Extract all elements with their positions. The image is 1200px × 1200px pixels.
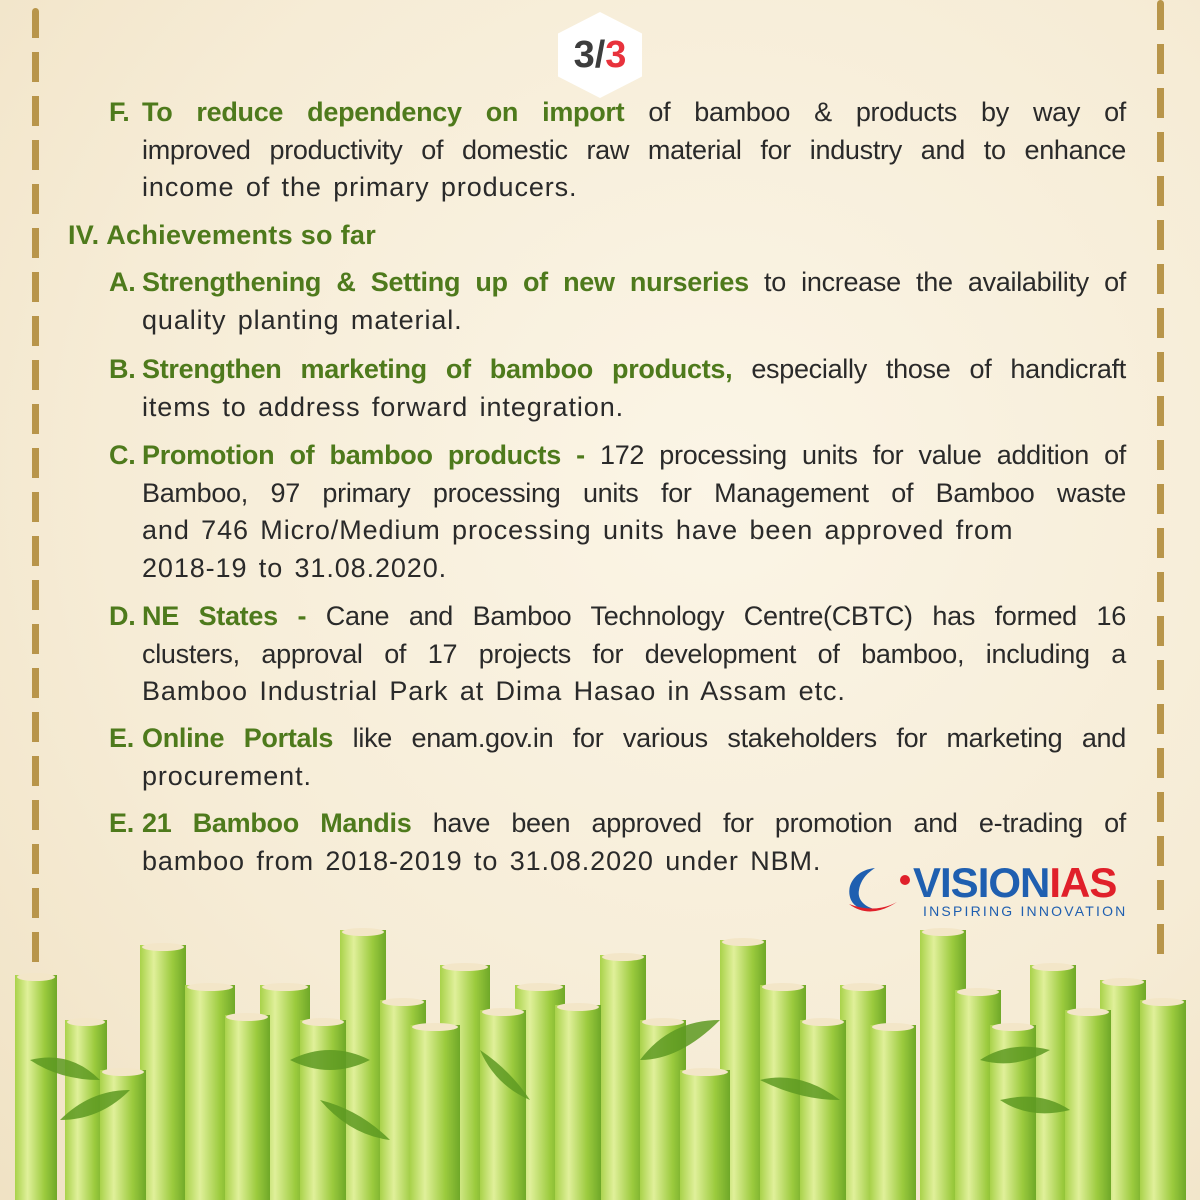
item E online portals: procurement.: [142, 760, 312, 790]
item B: items to address forward integration.: [142, 392, 624, 422]
item F: improved productivity of domestic raw material for industry and to enhance: [142, 134, 1126, 164]
text: F.: [109, 97, 129, 127]
item C: Promotion of bamboo products - 172 processing units for value addition of: [142, 440, 1126, 470]
item F: [109, 97, 1126, 202]
badge: page number: [558, 12, 642, 98]
text: A.: [109, 267, 135, 297]
item F: To reduce dependency on import of bamboo & products by way of: [142, 97, 1126, 127]
item E bamboo mandis: 21 Bamboo Mandis have been approved for promotion and e-trading of: [142, 808, 1126, 838]
text: C.: [109, 440, 135, 470]
item E bamboo mandis: bamboo from 2018-2019 to 31.08.2020 under NBM.: [142, 846, 821, 876]
item A: quality planting material.: [142, 304, 463, 334]
badge: page number: 3/3: [574, 34, 626, 76]
text: E.: [109, 723, 134, 753]
item C: and 746 Micro/Medium processing units have been approved from: [142, 515, 1013, 545]
text: D.: [109, 601, 135, 631]
item C: Bamboo, 97 primary processing units for Management of Bamboo waste: [142, 478, 1126, 508]
item E online portals: Online Portals like enam.gov.in for various stakeholders for marketing and: [142, 723, 1126, 753]
item B: [109, 354, 1126, 422]
item E bamboo mandis: [109, 808, 1126, 876]
heading: achievements: IV. Achievements so far: [68, 220, 376, 250]
text: E.: [109, 808, 134, 838]
item F: income of the primary producers.: [142, 172, 577, 202]
logo: Vision IAS: VISIONIAS: [913, 859, 1116, 906]
item C: 2018-19 to 31.08.2020.: [142, 552, 447, 582]
logo: Vision IAS: INSPIRING INNOVATION: [923, 903, 1128, 919]
item B: Strengthen marketing of bamboo products, especially those of handicraft: [142, 354, 1126, 384]
item D: NE States - Cane and Bamboo Technology Centre(CBTC) has formed 16: [142, 601, 1126, 631]
item D: clusters, approval of 17 projects for development of bamboo, including a: [142, 638, 1126, 668]
text: B.: [109, 354, 135, 384]
item A: Strengthening & Setting up of new nurseries to increase the availability of: [142, 267, 1126, 297]
item D: [109, 601, 1126, 706]
logo: Vision IAS: [849, 859, 1128, 919]
item E online portals: [109, 723, 1126, 790]
item C: [109, 440, 1126, 582]
item A: [109, 267, 1126, 334]
item D: Bamboo Industrial Park at Dima Hasao in Assam etc.: [142, 676, 846, 706]
